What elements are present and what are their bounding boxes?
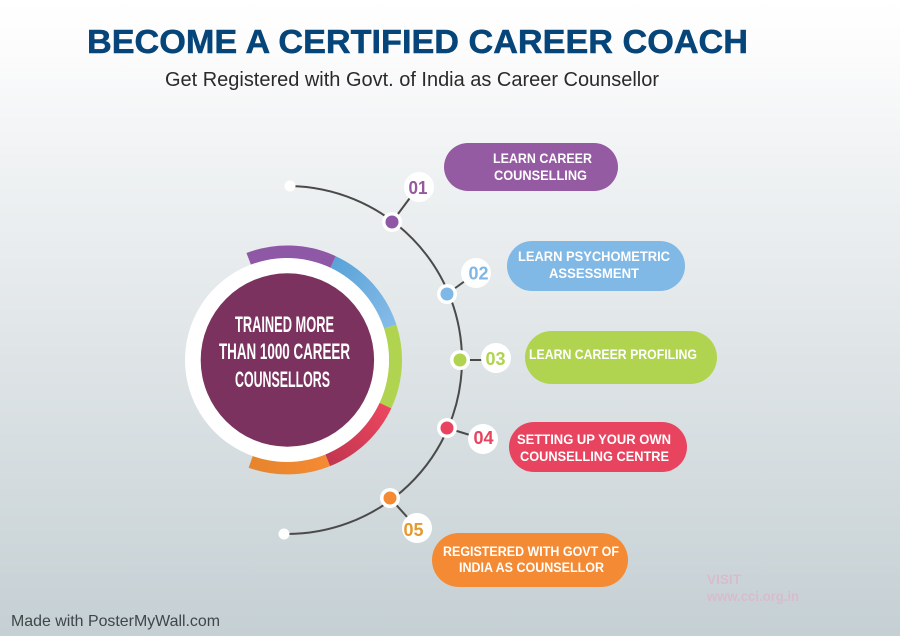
watermark footer: Made with PosterMyWall.com bbox=[11, 613, 220, 630]
title: BECOME A CERTIFIED CAREER COACH bbox=[87, 23, 748, 60]
curved timeline arc bbox=[284, 186, 462, 534]
arc end point top bbox=[284, 180, 296, 192]
segmented colour ring bbox=[249, 252, 395, 468]
step 04: 04 bbox=[474, 427, 494, 448]
step 03 bbox=[450, 331, 717, 384]
step 03: 03 bbox=[486, 348, 506, 369]
subtitle: Get Registered with Govt. of India as Career Counsellor bbox=[165, 69, 659, 91]
step 03: LEARN CAREER PROFILING bbox=[529, 347, 697, 362]
visit website note bbox=[706, 571, 799, 604]
step 01 bbox=[382, 143, 618, 232]
central circle badge: THAN 1000 CAREER bbox=[219, 339, 350, 364]
arc end point bottom bbox=[278, 528, 290, 540]
visit website note: VISIT bbox=[707, 571, 741, 587]
central circle badge: COUNSELLORS bbox=[235, 367, 330, 392]
step 04 bbox=[437, 418, 687, 472]
visit website note: www.cci.org.in bbox=[706, 588, 799, 604]
step 02: 02 bbox=[468, 262, 488, 284]
step 02: ASSESSMENT bbox=[549, 266, 640, 281]
step 02: LEARN PSYCHOMETRIC bbox=[518, 249, 670, 264]
step 05: 05 bbox=[404, 519, 424, 540]
step 02 bbox=[437, 241, 685, 304]
step 04: COUNSELLING CENTRE bbox=[520, 449, 669, 464]
step 04: SETTING UP YOUR OWN bbox=[517, 432, 671, 447]
step 05: REGISTERED WITH GOVT OF bbox=[443, 544, 619, 559]
step 01: 01 bbox=[408, 177, 428, 198]
central circle badge: TRAINED MORE bbox=[235, 312, 334, 337]
step 01: LEARN CAREER bbox=[493, 151, 592, 166]
central circle badge bbox=[185, 258, 389, 462]
step 01: COUNSELLING bbox=[494, 168, 587, 183]
step 05 bbox=[380, 488, 628, 587]
step 05: INDIA AS COUNSELLOR bbox=[459, 560, 604, 575]
